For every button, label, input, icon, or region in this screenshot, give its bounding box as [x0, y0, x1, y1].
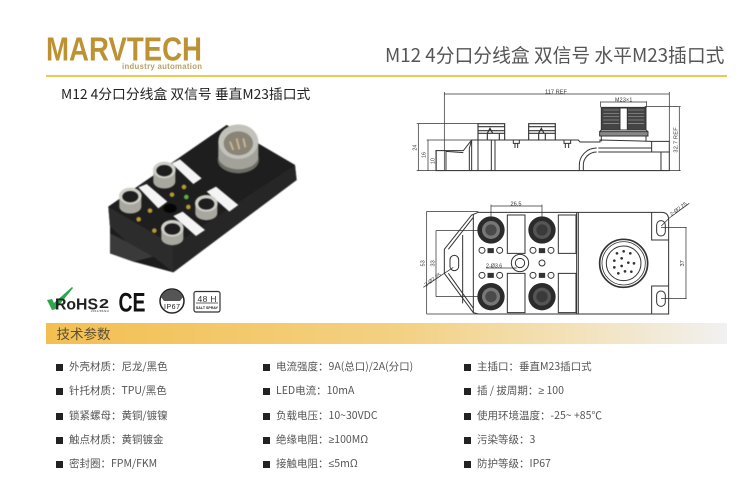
dimension labels: 10: [430, 158, 436, 164]
dimension labels: 2-Ø2.25: [669, 201, 688, 218]
icon: 48H salt spray: [194, 292, 220, 312]
spec column 1: 锁紧螺母：黄铜/镀镍: [69, 408, 168, 423]
spec column 3: 插 / 拔周期：≥ 100: [477, 383, 564, 398]
connector box body: [108, 125, 297, 272]
M23 main connector: [218, 124, 259, 173]
dimension labels: M23×1: [615, 98, 632, 104]
dimension labels: 16: [422, 152, 428, 158]
spec column 1: 外壳材质：尼龙/黑色: [69, 359, 168, 374]
dimension labels: 117 REF: [545, 89, 568, 95]
spec column 2: 负载电压：10~30VDC: [276, 408, 378, 423]
subtitle: M12 4分口分线盒 双信号 垂直M23插口式: [61, 83, 310, 103]
dimension labels: 2-Ø2.25: [424, 272, 443, 288]
M23 threaded connector: [601, 107, 646, 130]
centre screw hole: [163, 204, 177, 213]
dimension labels: [420, 201, 688, 288]
white label strips: [138, 159, 238, 236]
housing outline: [444, 212, 669, 314]
icon: RoHS 2: [47, 287, 109, 314]
section heading bar: 技术参数: 技术参数: [56, 323, 110, 343]
spec column 2: 绝缘电阻：≥100MΩ: [276, 432, 368, 447]
housing outline: [436, 140, 669, 171]
icon: 48H salt spray: 48 H: [198, 294, 216, 304]
icon: IP67: IP67: [164, 304, 180, 311]
dimension labels: 53: [420, 260, 426, 266]
spec column 3: 防护等级：IP67: [477, 456, 551, 471]
mounting slots: [657, 221, 665, 236]
dimension labels: 37: [680, 260, 686, 266]
icon: RoHS 2: 2: [99, 296, 109, 311]
header rule: [46, 75, 727, 77]
spec column 1: 针托材质：TPU/黑色: [69, 383, 167, 398]
dimension labels: 24: [412, 145, 418, 151]
spec column 1: 密封圈：FPM/FKM: [69, 456, 157, 471]
spec column 1: 触点材质：黄铜镀金: [69, 432, 164, 447]
dimension labels: 33: [431, 260, 437, 266]
spec column 2: 电流强度：9A(总口)/2A(分口): [276, 359, 413, 374]
icon: 48H salt spray: SALT SPRAY: [196, 306, 219, 310]
dimension labels: 26.5: [510, 201, 521, 207]
icon: RoHS 2: 2011/65/EU: [91, 309, 109, 313]
main title: M12 4分口分线盒 双信号 水平M23插口式: [385, 41, 724, 68]
icon: IP67: [160, 289, 184, 313]
M12 connectors: [119, 162, 218, 245]
section heading bar: 技术参数: [46, 323, 727, 344]
dimension labels: 2-Ø3.6: [486, 263, 502, 269]
LED indicators: [136, 185, 191, 233]
dimension lines: [417, 92, 681, 171]
M12 ports top: [477, 216, 556, 310]
M12 ports side: [478, 124, 505, 140]
spec column 3: 主插口：垂直M23插口式: [477, 359, 592, 374]
spec column 2: LED电流：10mA: [276, 383, 354, 398]
icon: CE mark: CE: [118, 288, 146, 318]
M23 main port: [600, 239, 648, 287]
spec column 3: 污染等级：3: [477, 432, 535, 447]
icon: RoHS 2: RoHS: [55, 296, 98, 314]
spec column 1: [56, 359, 168, 471]
LEDs and labels: [479, 247, 554, 278]
spec column 3: [464, 359, 602, 471]
dimension labels: [412, 89, 680, 164]
spec column 2: [263, 359, 413, 471]
logo: MARVTECH: MARVTECH: [46, 30, 202, 68]
spec column 2: 接触电阻：≤5mΩ: [276, 456, 358, 471]
logo: MARVTECH: industry automation: [122, 62, 202, 71]
spec column 3: 使用环境温度：-25~ +85℃: [477, 408, 602, 423]
dimension labels: 32.7 REF: [674, 127, 680, 153]
centre holes: [511, 254, 529, 272]
label windows: [507, 215, 576, 313]
dimension lines: [423, 203, 689, 314]
